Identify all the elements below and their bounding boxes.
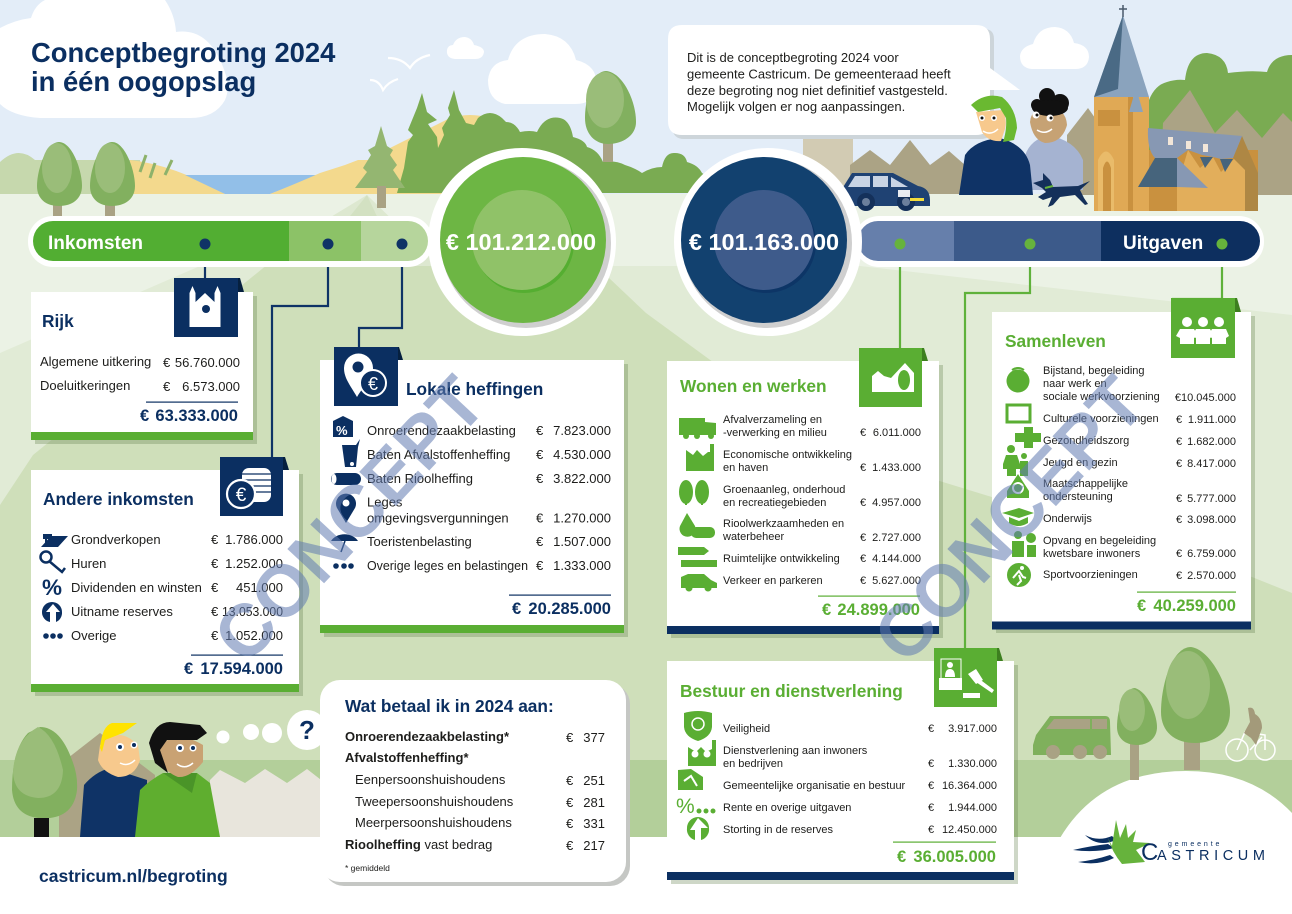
landscape: hills, dunes and forest xyxy=(0,90,710,208)
rows: 1.330.000 xyxy=(948,758,997,770)
rows: 4.144.000 xyxy=(872,553,921,565)
row icons xyxy=(331,416,361,569)
rows: 56.760.000 xyxy=(175,355,240,370)
rows: 3.917.000 xyxy=(948,723,997,735)
car xyxy=(840,173,930,211)
rows: € xyxy=(536,471,544,486)
panel: Rijk xyxy=(31,278,257,444)
connector lines expenses xyxy=(900,244,1222,650)
heading: Andere inkomsten xyxy=(43,489,194,509)
rows: € xyxy=(928,824,934,836)
total: 36.005.000 xyxy=(913,848,996,866)
rows: Afvalverzameling en xyxy=(723,414,822,426)
total: 20.285.000 xyxy=(528,600,611,618)
connector lines income xyxy=(205,244,402,458)
rows: Ruimtelijke ontwikkeling xyxy=(723,553,840,565)
rows: € xyxy=(566,773,574,788)
rows: 1.252.000 xyxy=(225,556,283,571)
rows: € xyxy=(211,604,219,619)
rows: € xyxy=(536,447,544,462)
rows: Storting in de reserves xyxy=(723,824,834,836)
rows: Afvalstoffenheffing* xyxy=(345,750,469,765)
rows xyxy=(345,729,605,853)
rows: Rioolheffing vast bedrag xyxy=(345,837,492,852)
title: Conceptbegroting 2024 xyxy=(31,37,336,68)
watermark: CONCEPT right: CONCEPT xyxy=(858,362,1161,678)
rows: 331 xyxy=(583,816,605,831)
rows: Culturele voorzieningen xyxy=(1043,413,1159,425)
speech bubble: Mogelijk volgen er nog aanpassingen. xyxy=(687,99,905,114)
rows xyxy=(722,414,921,587)
rows: € xyxy=(1176,414,1182,426)
footnote: * gemiddeld xyxy=(345,863,390,873)
rows: Gemeentelijke organisatie en bestuur xyxy=(723,780,906,792)
rows: 7.823.000 xyxy=(553,423,611,438)
rows: 3.098.000 xyxy=(1187,514,1236,526)
total: € xyxy=(184,660,193,678)
label: Inkomsten: Inkomsten xyxy=(48,233,143,254)
rows: € xyxy=(928,780,934,792)
title xyxy=(31,37,336,97)
rows: Opvang en begeleiding xyxy=(1043,535,1156,547)
total xyxy=(818,596,920,619)
total: € xyxy=(822,601,831,619)
church xyxy=(1094,5,1258,211)
village: houses and tower xyxy=(803,135,965,195)
rows: -verwerking en milieu xyxy=(723,427,827,439)
row icons xyxy=(678,418,717,592)
rows: 217 xyxy=(583,838,605,853)
rows: € xyxy=(860,575,866,587)
rows: 377 xyxy=(583,730,605,745)
birds xyxy=(370,55,430,90)
rows xyxy=(1043,365,1236,582)
rows: € xyxy=(536,558,544,573)
speech bubble: gemeente Castricum. De gemeenteraad heeft xyxy=(687,66,951,82)
rows: waterbeheer xyxy=(722,531,784,543)
rows: 16.364.000 xyxy=(942,780,997,792)
rows: 12.450.000 xyxy=(942,824,997,836)
rows: Rioolwerkzaamheden en xyxy=(723,518,844,530)
rows: 1.911.000 xyxy=(1188,414,1236,426)
total: 40.259.000 xyxy=(1153,597,1236,615)
rows: 251 xyxy=(583,773,605,788)
rows: € xyxy=(536,423,544,438)
rows: € xyxy=(1176,514,1182,526)
rows: Jeugd en gezin xyxy=(1043,457,1118,469)
logo: gemeente Castricum: ASTRICUM xyxy=(1157,848,1270,864)
rows: Baten Rioolheffing xyxy=(367,471,473,486)
total income circle xyxy=(428,148,616,336)
scene: two residents with thought bubbles: ? xyxy=(299,715,315,745)
rows: kwetsbare inwoners xyxy=(1043,548,1141,560)
icon: desk and gavel xyxy=(934,648,1003,707)
rows xyxy=(367,423,611,573)
rows: 6.011.000 xyxy=(873,427,921,439)
rows: Toeristenbelasting xyxy=(367,534,472,549)
rows: en haven xyxy=(723,462,768,474)
rows: en bedrijven xyxy=(723,758,783,770)
rows: Meerpersoonshuishoudens xyxy=(355,815,512,830)
rows: 13.053.000 xyxy=(222,604,283,619)
rows: € xyxy=(536,534,544,549)
rows: € xyxy=(211,580,219,595)
row icons: % xyxy=(42,575,62,600)
rows: € xyxy=(211,628,219,643)
rows: Uitname reserves xyxy=(71,604,173,619)
rows: Grondverkopen xyxy=(71,532,161,547)
rows: 6.573.000 xyxy=(182,379,240,394)
panel: Wonen en werken xyxy=(667,348,943,638)
total: € xyxy=(512,600,521,618)
rows: € xyxy=(536,510,544,526)
heading: Lokale heffingen xyxy=(406,379,543,399)
rows: 8.417.000 xyxy=(1187,458,1236,470)
total: 63.333.000 xyxy=(155,407,238,425)
rows: Bijstand, begeleiding xyxy=(1043,365,1145,377)
rows: Dienstverlening aan inwoners xyxy=(723,745,868,757)
rows: € xyxy=(928,758,934,770)
rows: € xyxy=(1176,458,1182,470)
rows: ondersteuning xyxy=(1043,491,1113,503)
rows: Onderwijs xyxy=(1043,513,1092,525)
rows: 4.530.000 xyxy=(553,447,611,462)
row icons: % xyxy=(676,795,695,818)
rows: Leges xyxy=(367,494,403,510)
rows: Maatschappelijke xyxy=(1043,478,1128,490)
rows: 1.052.000 xyxy=(225,628,283,643)
rows: €10.045.000 xyxy=(1175,392,1236,404)
total xyxy=(140,402,238,425)
rows: € xyxy=(566,816,574,831)
total xyxy=(509,594,611,618)
total: € xyxy=(1137,597,1146,615)
rows: 281 xyxy=(583,795,605,810)
icon: location and euro xyxy=(334,347,403,406)
people: municipal residents xyxy=(959,88,1083,195)
rows: Overige xyxy=(71,628,117,643)
rows: Sportvoorzieningen xyxy=(1043,569,1138,581)
rows: € xyxy=(1176,570,1182,582)
rows: € xyxy=(928,723,934,735)
rows: 1.682.000 xyxy=(1187,436,1236,448)
heading: Rijk xyxy=(42,311,74,331)
rows: Economische ontwikkeling xyxy=(723,449,852,461)
rows: omgevingsvergunningen xyxy=(367,510,509,526)
label: Uitgaven: Uitgaven xyxy=(1123,233,1203,254)
rows: € xyxy=(1176,548,1182,560)
speech bubble: Dit is de conceptbegroting 2024 voor xyxy=(687,50,899,65)
rows: sociale werkvoorziening xyxy=(1043,391,1160,403)
rows xyxy=(723,723,997,836)
logo: gemeente Castricum: C xyxy=(1141,839,1158,866)
rows: Dividenden en winsten xyxy=(71,580,202,595)
rows: 1.507.000 xyxy=(553,534,611,549)
rows: Gezondheidszorg xyxy=(1043,435,1129,447)
rows: € xyxy=(163,355,171,370)
rows: € xyxy=(211,532,219,547)
panel: Andere inkomsten xyxy=(31,457,303,696)
rows: Rente en overige uitgaven xyxy=(723,802,851,814)
rows: € xyxy=(860,427,866,439)
speech bubble: deze begroting nog niet definitief vastgesteld. xyxy=(687,83,948,98)
rows: Huren xyxy=(71,556,106,571)
rows: 1.433.000 xyxy=(872,462,921,474)
icon: coins xyxy=(220,457,289,516)
heading: Wat betaal ik in 2024 aan: xyxy=(345,696,554,716)
scene: trees, van, cyclist bottom right xyxy=(1033,647,1275,780)
row icons xyxy=(1002,368,1041,587)
rows: Doeluitkeringen xyxy=(40,378,130,393)
rows: € xyxy=(860,462,866,474)
total expenses circle xyxy=(674,148,862,336)
rows: € xyxy=(566,730,574,745)
total: € xyxy=(897,848,906,866)
rows: Onroerendezaakbelasting* xyxy=(345,729,510,744)
icon: coins: € xyxy=(236,485,247,506)
rows xyxy=(71,532,283,643)
icon: city hall xyxy=(174,278,244,337)
rows: € xyxy=(566,838,574,853)
total xyxy=(184,654,283,678)
rows: € xyxy=(211,556,219,571)
rows: Algemene uitkering xyxy=(40,354,151,369)
rows: 1.333.000 xyxy=(553,558,611,573)
trees xyxy=(37,71,636,216)
rows: Baten Afvalstoffenheffing xyxy=(367,447,510,462)
rows: 5.627.000 xyxy=(872,575,921,587)
total: € xyxy=(140,407,149,425)
panel: Bestuur en dienstverlening xyxy=(667,648,1018,884)
total expenses circle: € 101.163.000 xyxy=(689,229,839,255)
rows: € xyxy=(928,802,934,814)
rows: 6.759.000 xyxy=(1187,548,1236,560)
rows xyxy=(40,354,240,394)
rows: Veiligheid xyxy=(723,723,770,735)
rows: Verkeer en parkeren xyxy=(723,575,823,587)
panel: Lokale heffingen xyxy=(320,347,628,637)
rows: € xyxy=(860,532,866,544)
total: 17.594.000 xyxy=(200,660,283,678)
total xyxy=(893,842,996,866)
panel: Samenleven xyxy=(992,298,1255,633)
rows: 3.822.000 xyxy=(553,471,611,486)
total income circle: € 101.212.000 xyxy=(446,229,596,255)
income bar xyxy=(28,216,433,267)
rows: 1.944.000 xyxy=(948,802,997,814)
panel: Wat betaal ik xyxy=(320,680,630,886)
rows: naar werk en xyxy=(1043,378,1107,390)
rows: en recreatiegebieden xyxy=(723,497,826,509)
rows: € xyxy=(566,795,574,810)
dog xyxy=(1033,173,1090,207)
rows: € xyxy=(860,497,866,509)
scene: two residents with thought bubbles xyxy=(12,710,327,837)
website link: castricum.nl/begroting xyxy=(39,866,228,886)
rows: Tweepersoonshuishoudens xyxy=(355,794,514,809)
total: 24.899.000 xyxy=(837,601,920,619)
heading: Wonen en werken xyxy=(680,376,827,396)
rows: 2.570.000 xyxy=(1187,570,1236,582)
rows: € xyxy=(163,379,171,394)
rows: 1.270.000 xyxy=(553,510,611,526)
rows: € xyxy=(1176,493,1182,505)
rows: 4.957.000 xyxy=(872,497,921,509)
logo: gemeente Castricum xyxy=(1073,820,1270,866)
heading: Bestuur en dienstverlening xyxy=(680,681,903,701)
rows: 2.727.000 xyxy=(872,532,921,544)
rows: Groenaanleg, onderhoud xyxy=(723,484,845,496)
row icons xyxy=(40,534,68,639)
speech bubble xyxy=(668,25,1020,139)
background hills behind church xyxy=(1067,53,1292,195)
expenses bar xyxy=(854,216,1264,267)
rows: 451.000 xyxy=(236,580,283,595)
title: in één oogopslag xyxy=(31,66,256,97)
icon: location and euro: € xyxy=(368,374,378,394)
heading: Samenleven xyxy=(1005,331,1106,351)
row icons: % xyxy=(336,423,348,438)
watermark: CONCEPT left: CONCEPT xyxy=(198,362,501,678)
clouds xyxy=(0,0,1089,118)
rows: Eenpersoonshuishoudens xyxy=(355,772,506,787)
rows: 1.786.000 xyxy=(225,532,283,547)
rows: 5.777.000 xyxy=(1187,493,1236,505)
logo: gemeente Castricum: gemeente xyxy=(1168,841,1222,848)
rows: € xyxy=(1176,436,1182,448)
row icons xyxy=(676,711,716,840)
rows: Overige leges en belastingen xyxy=(367,558,528,573)
icon: three people xyxy=(1171,298,1241,358)
icon: house and tree xyxy=(859,348,928,407)
rows: Onroerendezaakbelasting xyxy=(367,423,516,438)
total xyxy=(1137,592,1236,615)
rows: € xyxy=(860,553,866,565)
